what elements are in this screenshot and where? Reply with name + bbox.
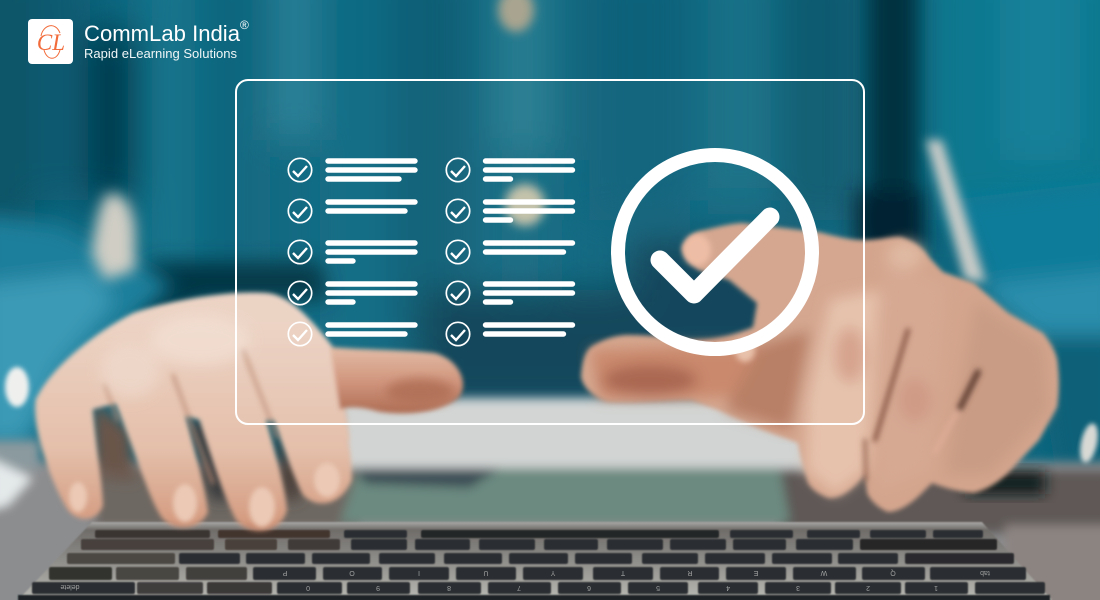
keyboard: delete	[60, 583, 80, 590]
item 1-1	[288, 158, 415, 182]
keyboard: 2	[866, 584, 870, 591]
keyboard: 6	[587, 584, 591, 591]
keyboard: P	[282, 569, 287, 576]
keyboard: Y	[550, 569, 555, 576]
item 2-5	[446, 322, 572, 346]
keyboard: 0	[306, 584, 310, 591]
keyboard: 7	[517, 584, 521, 591]
background: laptop body	[0, 398, 1100, 600]
item 2-1	[446, 158, 572, 182]
item 2-2	[446, 199, 572, 223]
keyboard: O	[349, 569, 355, 576]
keyboard: T	[620, 569, 625, 576]
sleeve button right	[1077, 422, 1100, 464]
large check badge	[618, 155, 812, 349]
tagline: Rapid eLearning Solutions	[84, 46, 237, 61]
keyboard: Q	[890, 569, 896, 576]
keyboard: I	[418, 569, 420, 576]
keyboard: 9	[376, 584, 380, 591]
keyboard: tab	[980, 569, 990, 576]
logo mark	[28, 19, 73, 64]
keyboard: W	[820, 569, 827, 576]
sleeve button left	[5, 367, 29, 407]
keyboard: 3	[796, 584, 800, 591]
right hand	[581, 223, 1059, 512]
item 2-3	[446, 240, 572, 264]
keyboard: 4	[726, 584, 730, 591]
keyboard: 1	[934, 584, 938, 591]
logo	[28, 18, 249, 64]
item 1-2	[288, 199, 415, 223]
keyboard	[18, 522, 1052, 600]
logo mark: CL	[37, 30, 65, 55]
item 1-3	[288, 240, 415, 264]
keyboard: 5	[656, 584, 660, 591]
item 1-4	[288, 281, 415, 305]
registered mark: ®	[240, 18, 249, 32]
keyboard: U	[483, 569, 489, 576]
keyboard: R	[687, 569, 693, 576]
checklist: column 1	[288, 158, 415, 346]
keyboard: E	[753, 569, 758, 576]
item 1-5	[288, 322, 415, 346]
checklist: column 2	[446, 158, 572, 346]
glass panel	[236, 80, 864, 424]
keyboard: 8	[447, 584, 451, 591]
item 2-4	[446, 281, 572, 305]
left hand	[35, 292, 463, 531]
brand name: CommLab India	[84, 21, 241, 46]
